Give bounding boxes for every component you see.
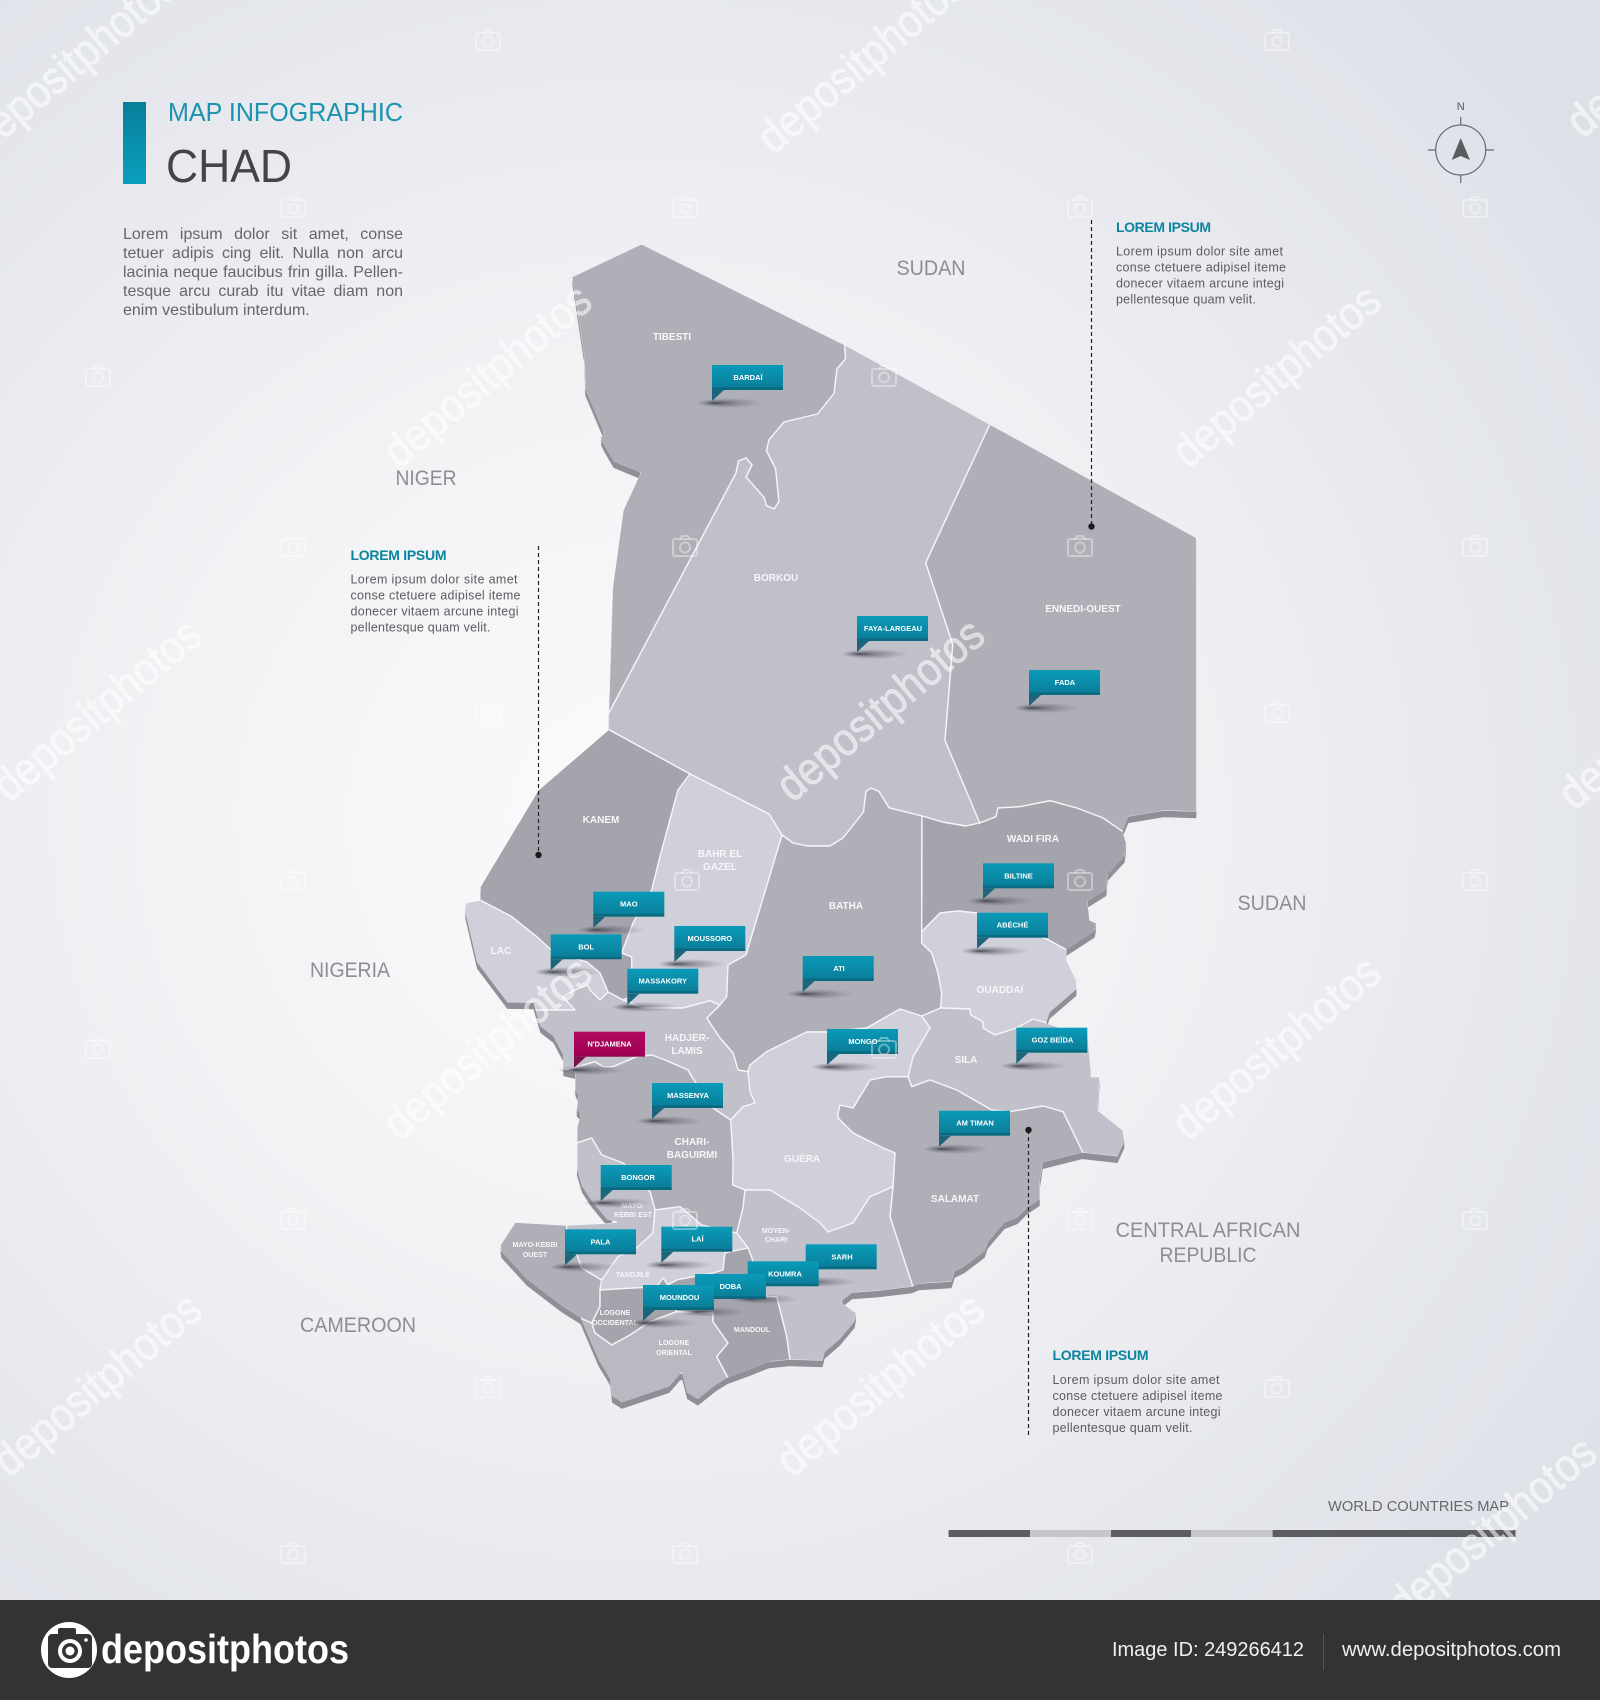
region: Moyen-Chari [737, 1187, 913, 1361]
region names: GAZEL [703, 862, 737, 873]
region: Ennedi-Ouest [926, 424, 1197, 832]
region names: BATHA [829, 901, 863, 912]
marker: Mongo: MONGO [848, 1037, 878, 1046]
watermark text: depositphotos [765, 607, 994, 811]
marker: Bongor [584, 1165, 672, 1208]
intro paragraph: enim vestibulum interdum. [123, 302, 310, 319]
marker: Goz Beida [1000, 1028, 1087, 1071]
region names: OCCIDENTAL [592, 1319, 639, 1327]
neighbouring country names: CENTRAL AFRICAN [1116, 1219, 1300, 1242]
marker: Bol [534, 934, 622, 977]
region names: CHARI- [674, 1137, 710, 1148]
region names [491, 332, 1121, 1357]
title: CHAD [166, 140, 292, 192]
marker: Moundou: MOUNDOU [660, 1293, 699, 1302]
region: Lac [465, 900, 608, 1010]
region names: TIBESTI [653, 332, 691, 343]
callout: bottom right: Lorem ipsum dolor site amet [1052, 1373, 1220, 1387]
marker: N'Djamena capital: N'DJAMENA [587, 1040, 632, 1049]
callout: top right: conse ctetuere adipisel iteme [1116, 260, 1286, 274]
marker: Faya-Largeau: FAYA-LARGEAU [864, 624, 922, 633]
marker: Massakory: MASSAKORY [639, 977, 687, 986]
callout: top right: pellentesque quam velit. [1116, 292, 1256, 306]
scale bar [949, 1498, 1516, 1537]
callout: left: Lorem ipsum dolor site amet [350, 572, 518, 586]
callout: bottom right: conse ctetuere adipisel iteme [1052, 1389, 1223, 1403]
region names: BAGUIRMI [667, 1150, 717, 1161]
marker: Bardai: BARDAÏ [733, 373, 763, 382]
callout: top right [1088, 219, 1286, 530]
marker: Sarh [789, 1244, 877, 1287]
marker: Moussoro [658, 926, 745, 969]
watermark camera icons [86, 30, 1487, 1563]
neighbouring country names [300, 257, 1306, 1337]
marker: Massenya: MASSENYA [667, 1091, 709, 1100]
callout: top right: donecer vitaem arcune integi [1116, 276, 1284, 290]
region: Batha [707, 788, 942, 1072]
marker: Abeche: ABÉCHÉ [997, 921, 1028, 930]
depositphotos logo: depositphotos [101, 1626, 349, 1672]
marker: Am Timan: AM TIMAN [956, 1119, 994, 1128]
marker: Doba: DOBA [719, 1282, 742, 1291]
region names: LAMIS [671, 1046, 703, 1057]
region: Logone Oriental [580, 1312, 728, 1403]
region names: LAC [491, 946, 511, 957]
marker: Am Timan [923, 1111, 1010, 1154]
image id: Image ID: 249266412 [1112, 1639, 1304, 1661]
marker: Sarh: SARH [831, 1252, 853, 1261]
region: Logone Occidental [592, 1278, 677, 1345]
neighbouring country names: CAMEROON [300, 1314, 416, 1337]
marker: Massakory [611, 969, 698, 1012]
neighbouring country names: NIGERIA [310, 959, 390, 982]
region: Guera [731, 1009, 930, 1232]
website: www.depositphotos.com [1341, 1639, 1561, 1661]
marker: Moussoro: MOUSSORO [688, 934, 732, 943]
callout: top right: LOREM IPSUM [1116, 219, 1211, 235]
region: Ouaddai [922, 911, 1077, 1035]
region names: ENNEDI-OUEST [1045, 604, 1121, 615]
marker: Lai [645, 1227, 732, 1270]
region names: LOGONE [659, 1339, 690, 1347]
callout: left [350, 546, 542, 858]
compass [1428, 101, 1494, 183]
marker: Koumra: KOUMRA [768, 1269, 802, 1278]
region: Mayo-Kebbi Est [567, 1138, 655, 1280]
watermark text: depositphotos [372, 273, 601, 477]
region names: GUÉRA [784, 1152, 820, 1165]
map of Chad regions [465, 244, 1197, 1403]
region names: SILA [955, 1055, 977, 1066]
region names: TANDJILÉ [616, 1270, 650, 1279]
intro paragraph [123, 226, 403, 319]
neighbouring country names: SUDAN [1238, 892, 1306, 915]
title kicker: MAP INFOGRAPHIC [168, 97, 403, 127]
marker: Bol: BOL [578, 942, 595, 951]
marker: N'Djamena capital [558, 1032, 645, 1075]
title accent bar [123, 102, 146, 184]
compass: N [1457, 101, 1465, 113]
marker: Mao [577, 892, 664, 935]
region names: CHARI [765, 1236, 787, 1244]
watermark text: depositphotos [765, 1282, 994, 1486]
marker: Fada: FADA [1055, 678, 1076, 687]
marker: Massenya [636, 1083, 723, 1126]
region names: MAYO- [622, 1202, 645, 1210]
marker: Ati: ATI [833, 964, 845, 973]
region names: BORKOU [754, 573, 798, 584]
marker: Biltine [967, 863, 1054, 906]
callout: bottom right: LOREM IPSUM [1052, 1347, 1148, 1363]
region: Hadjer-Lamis [535, 985, 755, 1120]
marker: Bardai [696, 365, 783, 408]
region: Wadi Fira [922, 801, 1127, 950]
region names: MAYO-KEBBI [512, 1241, 558, 1249]
marker: Koumra [731, 1261, 819, 1304]
intro paragraph: lacinia neque faucibus frin gilla. Pellen- [123, 264, 403, 281]
watermark text: depositphotos [1161, 945, 1390, 1149]
divider [1322, 1634, 1324, 1670]
region: Tandjile [600, 1207, 748, 1290]
region names: HADJER- [665, 1033, 709, 1044]
region names: WADI FIRA [1007, 834, 1059, 845]
marker: Mongo [811, 1029, 898, 1072]
callout: left: LOREM IPSUM [350, 547, 446, 563]
marker: Lai: LAÏ [691, 1235, 704, 1244]
region: Tibesti [572, 244, 846, 714]
intro paragraph: Lorem ipsum dolor sit amet, conse [123, 226, 403, 243]
region: Salamat [838, 1077, 1083, 1287]
region names: SALAMAT [931, 1194, 979, 1205]
marker: Biltine: BILTINE [1004, 871, 1033, 880]
region names: OUADDAÏ [977, 983, 1024, 996]
depositphotos logo [41, 1622, 349, 1678]
marker: Fada [1013, 670, 1100, 713]
region names: BAHR EL [698, 849, 742, 860]
marker: Pala [549, 1229, 636, 1272]
region: Sila [908, 1008, 1125, 1157]
marker: Abeche [961, 913, 1048, 956]
scale bar: WORLD COUNTRIES MAP [1328, 1498, 1509, 1515]
marker: Pala: PALA [591, 1237, 611, 1246]
marker: Moundou [627, 1285, 714, 1328]
region names: ORIENTAL [656, 1349, 693, 1357]
region names: MOYEN- [762, 1227, 791, 1235]
intro paragraph: tetuer adipis cing elit. Nulla non arcu [123, 245, 403, 262]
watermark text: depositphotos [372, 945, 601, 1149]
callout: top right: Lorem ipsum dolor site amet [1116, 244, 1284, 258]
callout: left: pellentesque quam velit. [350, 620, 490, 634]
marker: Bongor: BONGOR [621, 1173, 655, 1182]
region names: KANEM [583, 815, 619, 826]
region: Bahr el Gazel [622, 774, 782, 1008]
region: Mandoul [668, 1248, 790, 1378]
callout: left: donecer vitaem arcune integi [350, 604, 518, 618]
marker: Ati [786, 956, 874, 999]
neighbouring country names: SUDAN [896, 257, 966, 280]
intro paragraph: tesque arcu curab itu vitae diam non [123, 283, 403, 300]
region: Borkou [608, 344, 990, 846]
region: Kanem [480, 729, 690, 1000]
neighbouring country names: NIGER [396, 467, 456, 490]
marker: Mao: MAO [620, 900, 638, 909]
region names: KEBBI EST [614, 1211, 653, 1219]
extruded map edge [465, 247, 1197, 1410]
footer band [0, 1600, 1600, 1700]
callout: left: conse ctetuere adipisel iteme [350, 588, 521, 602]
region names: OUEST [523, 1251, 548, 1259]
watermark text: depositphotos [1161, 273, 1390, 477]
callout: bottom right: pellentesque quam velit. [1052, 1421, 1192, 1435]
callout: bottom right [1025, 1127, 1223, 1437]
callout: bottom right: donecer vitaem arcune integi [1052, 1405, 1220, 1419]
region names: LOGONE [600, 1309, 631, 1317]
region names: MANDOUL [734, 1326, 771, 1334]
neighbouring country names: REPUBLIC [1160, 1244, 1256, 1267]
marker: Faya-Largeau [841, 616, 928, 659]
marker: Doba [679, 1274, 766, 1317]
region: Mayo-Kebbi Ouest [500, 1222, 602, 1323]
region: Chari-Baguirmi [563, 1055, 745, 1233]
marker: Goz Beida: GOZ BEÏDA [1032, 1036, 1074, 1045]
